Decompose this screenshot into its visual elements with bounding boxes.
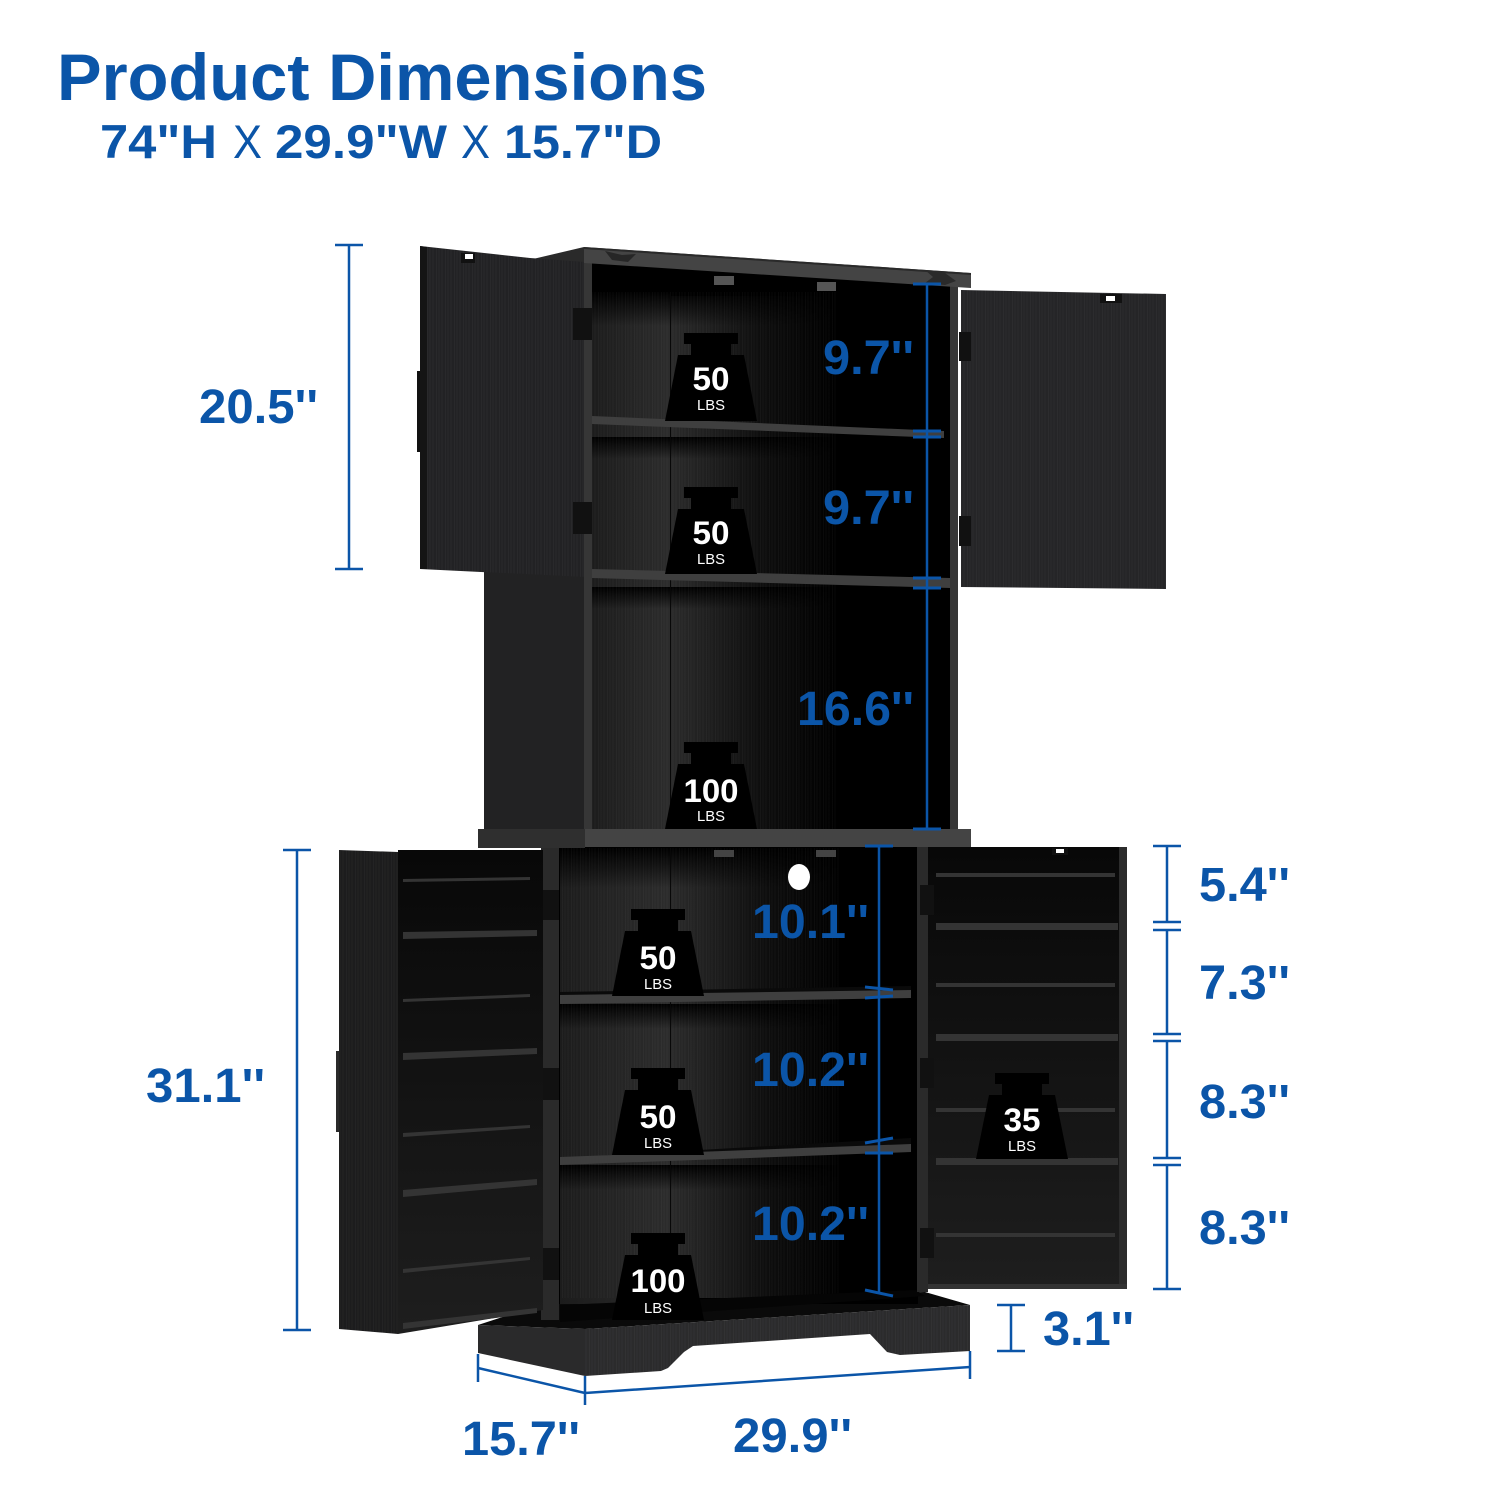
weight: 50 lbs, lower top shelf: LBS [644, 976, 672, 993]
subtitle: overall dimensions: 29.9"W [275, 115, 448, 168]
dimension: depth [462, 1354, 585, 1466]
interior labels: 16.6'' [797, 683, 914, 736]
weight: 50 lbs, second shelf: 50 [692, 515, 730, 551]
upper shelves [592, 416, 950, 588]
dimension: width: 29.9'' [733, 1410, 852, 1463]
dimension: door shelf spacing: 8.3'' [1199, 1076, 1290, 1129]
interior labels: 10.2'' [752, 1044, 869, 1097]
weight: 100 lbs, upper bottom [665, 742, 757, 829]
left door, lower [336, 850, 543, 1334]
weight: 50 lbs, lower top shelf [612, 909, 704, 996]
shelf dimension line, lower [865, 846, 893, 1296]
upper cabinet interior [590, 262, 952, 832]
right door, upper [961, 290, 1166, 589]
dimension: door shelf spacing [1153, 846, 1290, 1289]
weight: 50 lbs, lower top shelf: 50 [640, 940, 676, 976]
weight: 50 lbs, lower middle shelf [612, 1068, 704, 1155]
upper cabinet [417, 246, 1166, 833]
left door shelves [403, 877, 537, 1329]
weight: 100 lbs, upper bottom: 100 [684, 773, 738, 809]
weight: 50 lbs, top shelf: LBS [697, 397, 725, 414]
weight: 100 lbs, lower bottom: 100 [630, 1263, 686, 1299]
cable hole [788, 864, 810, 890]
dimension: upper door height: 20.5'' [199, 381, 318, 434]
plinth base [478, 1292, 970, 1376]
weight: 50 lbs, top shelf: 50 [692, 361, 730, 397]
top board [533, 247, 971, 288]
lower cabinet posts [541, 846, 928, 1320]
lower cabinet [336, 846, 1127, 1376]
weight: 35 lbs, door shelf: LBS [1008, 1138, 1036, 1155]
weight: 50 lbs, lower middle shelf: LBS [644, 1135, 672, 1152]
weight: 35 lbs, door shelf [976, 1073, 1068, 1159]
dimension: lower door height: 31.1'' [146, 1060, 265, 1113]
subtitle: overall dimensions: 74"H [100, 115, 217, 168]
subtitle: overall dimensions: X [233, 115, 262, 168]
dimension: upper door height [199, 245, 363, 569]
lower cabinet interior [552, 846, 925, 1322]
left door, upper [417, 246, 584, 577]
weight: 100 lbs, lower bottom [612, 1233, 704, 1320]
upper cabinet posts [584, 262, 958, 830]
interior labels [752, 332, 914, 1251]
door hinges [573, 308, 971, 546]
lower shelves [560, 986, 911, 1165]
dimension: plinth height [997, 1303, 1134, 1356]
dimension: lower door height [146, 850, 311, 1330]
lower door hinges [543, 885, 934, 1280]
weight: 50 lbs, top shelf [665, 333, 757, 421]
lower mounting clips [714, 850, 836, 857]
weight: 50 lbs, second shelf [665, 487, 757, 574]
dimension: plinth height: 3.1'' [1043, 1303, 1134, 1356]
right door, lower [928, 847, 1127, 1289]
interior labels: 9.7'' [823, 482, 914, 535]
top mounting clips [714, 276, 836, 291]
dimension: width [585, 1351, 970, 1463]
subtitle: overall dimensions: 15.7"D [504, 115, 662, 168]
weight: 100 lbs, lower bottom: LBS [644, 1300, 672, 1317]
interior labels: 10.1'' [752, 896, 869, 949]
dimension: depth: 15.7'' [462, 1413, 580, 1466]
subtitle: overall dimensions: X [461, 115, 490, 168]
upper cabinet side panel [484, 565, 586, 833]
dimension: door shelf spacing: 8.3'' [1199, 1202, 1290, 1255]
dimension: door shelf spacing: 5.4'' [1199, 859, 1290, 912]
right door shelves [936, 873, 1118, 1237]
weight: 35 lbs, door shelf: 35 [1004, 1102, 1040, 1138]
shelf dimension line, upper [913, 284, 941, 829]
weight: 100 lbs, upper bottom: LBS [697, 808, 725, 825]
dimension: door shelf spacing: 7.3'' [1199, 957, 1290, 1010]
interior labels: 10.2'' [752, 1198, 869, 1251]
interior labels: 9.7'' [823, 332, 914, 385]
weight: 50 lbs, second shelf: LBS [697, 551, 725, 568]
weight: 50 lbs, lower middle shelf: 50 [640, 1099, 676, 1135]
subtitle: overall dimensions [100, 115, 662, 168]
title: Product Dimensions [57, 40, 707, 114]
middle board [478, 829, 971, 848]
